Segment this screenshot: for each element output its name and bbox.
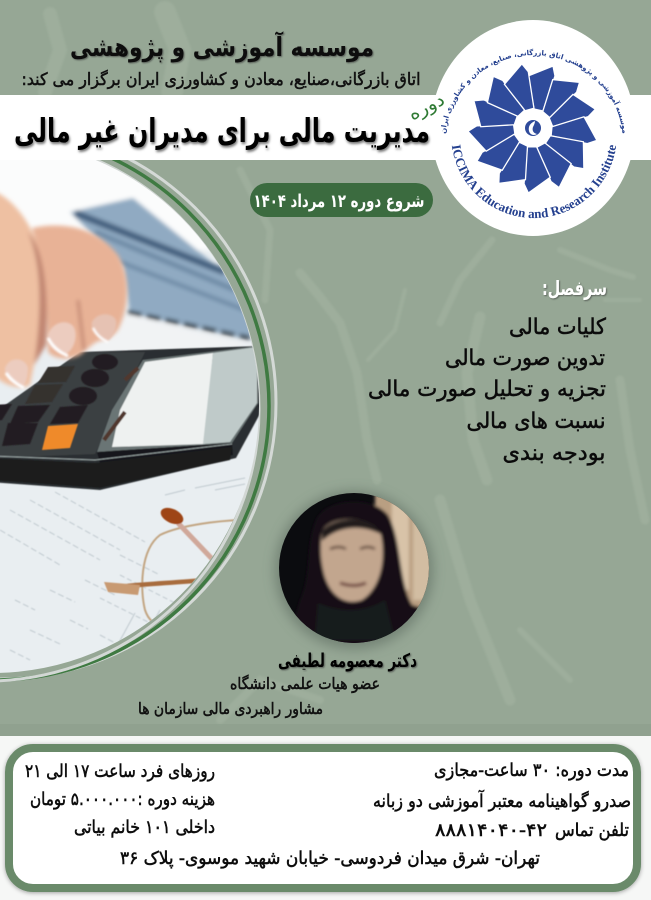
- address: تهران- شرق میدان فردوسی- خیابان شهید موسوی- پلاک ۳۶: [120, 848, 540, 869]
- paper under calculator: [126, 312, 248, 343]
- panel: calculator photo: [0, 160, 278, 682]
- phone: [435, 820, 629, 841]
- presenter portrait: [275, 490, 435, 650]
- panel: syllabus: [368, 276, 607, 466]
- start date pill: [250, 183, 433, 217]
- calculator keys: [0, 354, 118, 450]
- phone: ۸۸۸۱۴۰۴۰-۴۲: [435, 820, 547, 841]
- circle frame arcs: [0, 127, 276, 681]
- syllabus item 1: کلیات مالی: [509, 315, 606, 340]
- icon: blue pinwheel: [467, 63, 597, 193]
- syllabus item 4: نسبت های مالی: [466, 409, 606, 434]
- syllabus item 2: تدوین صورت مالی: [445, 346, 605, 371]
- syllabus item 5: بودجه بندی: [502, 441, 606, 466]
- start date pill: شروع دوره ۱۲ مرداد ۱۴۰۴: [254, 191, 424, 212]
- calculator body: [0, 346, 262, 490]
- presenter role 2: مشاور راهبردی مالی سازمان ها: [138, 699, 323, 719]
- papers: [0, 478, 245, 668]
- blurred keyboard behind: [70, 198, 258, 340]
- fee: هزینه دوره :۵.۰۰۰.۰۰۰ تومان: [30, 789, 215, 810]
- presenter role 1: عضو هیات علمی دانشگاه: [230, 674, 380, 694]
- white title band: [0, 95, 651, 160]
- logo text: persian arc: موسسه آموزشی و پژوهشی اتاق بازرگانی، صنایع، معادن و کشاورزی ایران: [441, 48, 625, 134]
- syllabus item 3: تجزیه و تحلیل صورت مالی: [368, 377, 606, 402]
- heading: dore label: دوره: [405, 89, 448, 125]
- phone: تلفن تماس: [555, 820, 629, 841]
- eyeglasses: [104, 507, 234, 622]
- schedule: روزهای فرد ساعت ۱۷ الی ۲۱: [25, 761, 215, 782]
- duration: مدت دوره: ۳۰ ساعت-مجازی: [434, 760, 629, 781]
- orange key: [42, 424, 78, 450]
- syllabus heading: سرفصل:: [542, 276, 607, 300]
- heading: institute name: موسسه آموزشی و پژوهشی: [70, 31, 374, 63]
- heading: organiser line: اتاق بازرگانی،صنایع، معادن و کشاورزی ایران برگزار می کند:: [22, 69, 420, 90]
- presenter name: دکتر معصومه لطیفی: [278, 650, 417, 672]
- panel: course details: [0, 736, 651, 900]
- hand: [0, 190, 127, 387]
- title: مدیریت مالی برای مدیران غیر مالی: [14, 111, 430, 151]
- logo text: english arc: ICCIMA Education and Research Institute: [452, 144, 616, 218]
- logo: institute emblem: [436, 20, 630, 236]
- extension: داخلی ۱۰۱ خانم بیاتی: [74, 817, 215, 838]
- fingernails: [5, 314, 116, 388]
